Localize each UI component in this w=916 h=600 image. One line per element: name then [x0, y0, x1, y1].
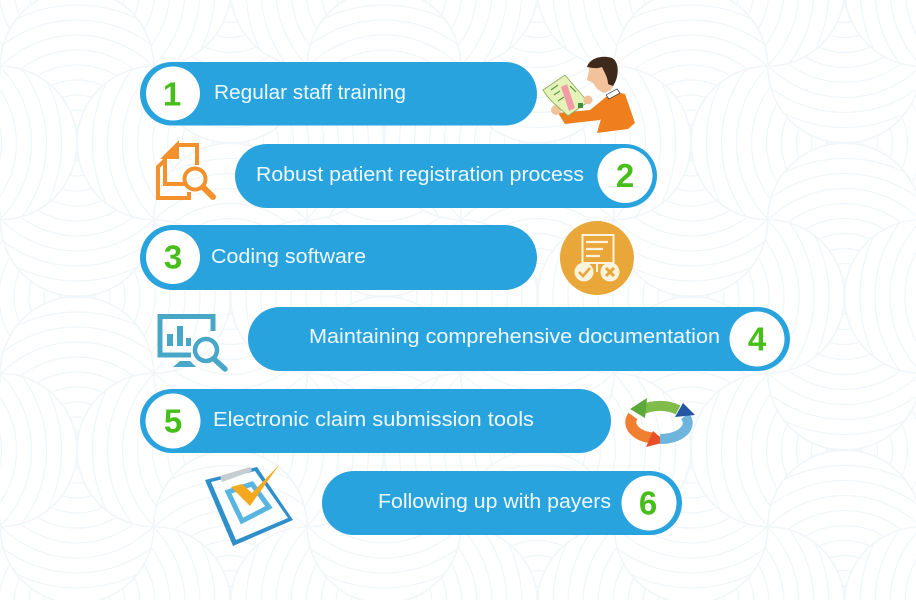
step 3: Coding software: 3 [164, 238, 182, 276]
icon: man reading document [543, 57, 635, 133]
icon: circular arrows [630, 398, 695, 447]
icon: documents with magnifier [158, 145, 213, 198]
step 4: Maintaining comprehensive documentation: Maintaining comprehensive documentation [309, 325, 720, 348]
step 6: Following up with payers [322, 471, 682, 535]
step 3: Coding software: Coding software [211, 245, 366, 268]
step 1: Regular staff training: Regular staff training [214, 81, 406, 104]
step 2: Robust patient registration process: Robust patient registration process [256, 163, 584, 186]
step 1: Regular staff training [140, 62, 537, 126]
step 4: Maintaining comprehensive documentation: 4 [748, 320, 767, 358]
step 5: Electronic claim submission tools: Electronic claim submission tools [213, 408, 534, 431]
icon: checklist with check and cross [560, 221, 634, 295]
icon: monitor chart with magnifier [160, 316, 225, 369]
step 6: Following up with payers: 6 [639, 484, 657, 522]
step 3: Coding software [140, 225, 537, 290]
step 2: Robust patient registration process: 2 [616, 157, 634, 194]
step 6: Following up with payers: Following up with payers [378, 490, 611, 513]
step 4: Maintaining comprehensive documentation [248, 307, 790, 371]
step 5: Electronic claim submission tools [140, 389, 611, 453]
step 1: Regular staff training: 1 [163, 76, 181, 112]
step 5: Electronic claim submission tools: 5 [164, 402, 182, 440]
icon: clipboard with check mark [205, 465, 293, 546]
step 2: Robust patient registration process [235, 144, 657, 208]
